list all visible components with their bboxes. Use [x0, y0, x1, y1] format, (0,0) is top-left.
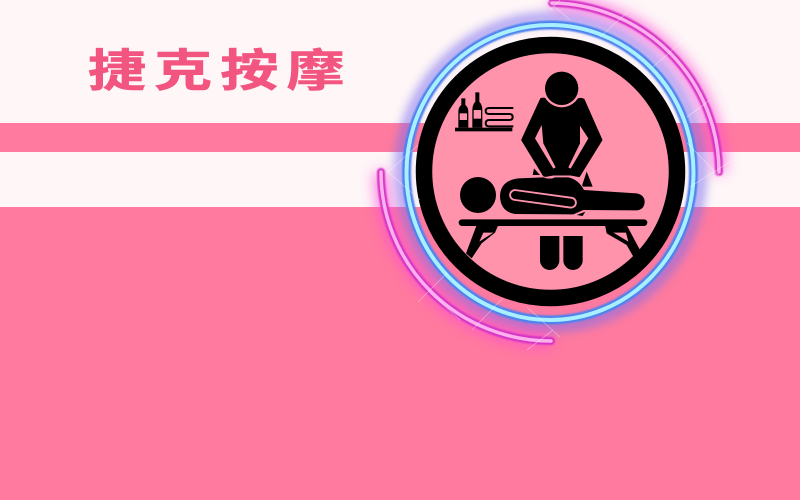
icon: shelf with bottles and towels [455, 92, 513, 131]
icon: masseur [522, 69, 602, 187]
badge: black ring with pink disc [424, 45, 677, 298]
icon: massage scene [455, 69, 645, 270]
icon: massage table [462, 223, 644, 270]
sparkle rays [388, 0, 733, 350]
neon arc: top right [552, 3, 719, 172]
icon: client lying down [460, 177, 645, 216]
neon glow halo [381, 3, 719, 341]
neon blue ring [406, 25, 694, 320]
title: 捷克按摩 [88, 46, 353, 95]
neon arc: bottom left [381, 172, 551, 341]
